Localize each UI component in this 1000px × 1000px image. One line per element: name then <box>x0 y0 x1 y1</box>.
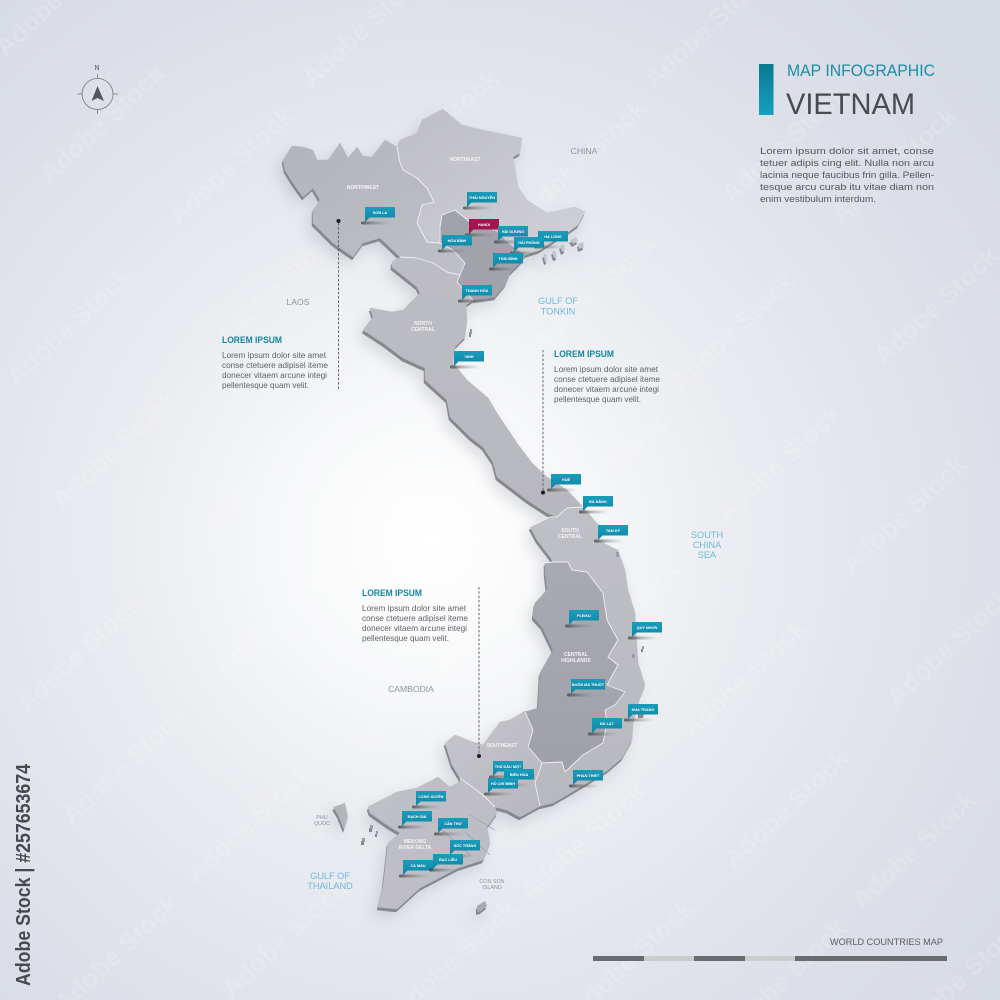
watermarks: Adobe Stock <box>716 78 853 209</box>
map of Vietnam <box>283 109 645 912</box>
label: south china sea: SOUTH <box>691 530 723 540</box>
label: gulf of thailand: GULF OF <box>310 871 350 881</box>
pin: Son La <box>361 207 395 224</box>
region: southeast <box>445 711 542 817</box>
callout leader: central <box>541 350 545 494</box>
subtitle: map infographic: MAP INFOGRAPHIC <box>787 62 935 80</box>
callout: south: LOREM IPSUM <box>362 588 422 599</box>
callout: center: conse ctetuere adipisel iteme <box>554 374 660 384</box>
label: laos: LAOS <box>287 297 310 307</box>
pin: Nha Trang <box>624 704 658 722</box>
watermarks: Adobe Stock <box>34 58 171 189</box>
pin: Thu Dau Mot <box>489 761 523 778</box>
pin: Hoa Binh <box>438 235 472 252</box>
pin: Hai Phong: HẢI PHÒNG <box>518 240 540 245</box>
callout: south: conse ctetuere adipisel iteme <box>362 613 468 623</box>
river channels <box>440 815 495 855</box>
pin: Rach Gia: RẠCH GIÁ <box>408 814 427 819</box>
callout: south: Lorem ipsum dolor site amet <box>362 603 467 613</box>
pin: Nha Trang: NHA TRANG <box>632 708 654 712</box>
pin: Pleiku <box>565 610 599 628</box>
label: south central: SOUTH <box>561 528 579 534</box>
pin: Thai Binh <box>489 253 523 270</box>
watermarks: Adobe Stock <box>11 588 148 719</box>
pin: Da Lat <box>588 718 622 736</box>
watermarks: Adobe Stock <box>526 228 663 359</box>
pin: Hai Duong <box>494 226 528 244</box>
watermarks: Adobe Stock <box>514 776 651 907</box>
callout: center: LOREM IPSUM <box>554 349 614 360</box>
watermarks: Adobe Stock <box>346 628 483 759</box>
label: northwest: NORTHWEST <box>347 185 379 191</box>
callout: center: donecer vitaem arcune integi <box>554 384 659 394</box>
region: mekong river delta <box>368 777 497 909</box>
label: north central: NORTH <box>414 321 432 327</box>
pin: Hue: HUẾ <box>562 477 570 482</box>
islands: ha long bay <box>543 237 584 262</box>
label: south china sea: SEA <box>698 550 717 560</box>
pin: Da Nang <box>579 496 613 514</box>
pin: Tam Ky <box>594 525 628 542</box>
watermarks: Adobe Stock <box>664 266 801 397</box>
pin: Soc Trang: SÓC TRĂNG <box>454 843 476 848</box>
watermarks: Adobe Stock <box>718 743 855 874</box>
callout: left <box>222 335 328 390</box>
pin: Bien Hoa: BIÊN HÒA <box>510 772 529 777</box>
label: gulf of thailand: THAILAND <box>307 881 353 891</box>
pin: Rach Gia <box>398 811 432 828</box>
island: phu quoc <box>333 803 348 830</box>
watermarks: Adobe Stock <box>334 269 471 400</box>
pin: Long Xuyen: LONG XUYÊN <box>418 794 444 799</box>
pin: Ca Mau: CÀ MAU <box>410 863 426 868</box>
pin: Phan Thiet: PHAN THIẾT <box>577 773 600 778</box>
label: south china sea: CHINA <box>693 540 722 550</box>
label: southeast: SOUTHEAST <box>487 743 517 749</box>
pin: Can Tho: CẦN THƠ <box>444 822 463 826</box>
label: con son island: CON SON <box>479 879 505 885</box>
watermarks: Adobe Stock <box>676 613 813 744</box>
callout: center: Lorem ipsum dolor site amet <box>554 364 659 374</box>
label: north central: CENTRAL <box>411 327 435 333</box>
pin: Hanoi <box>465 219 499 236</box>
pin: Hai Phong <box>510 237 544 254</box>
intro paragraph: tetuer adipis cing elit. Nulla non arcu <box>760 157 934 168</box>
pin: Phan Thiet <box>569 770 603 788</box>
pin: Bac Lieu: BẠC LIÊU <box>439 857 457 862</box>
watermarks: Adobe Stock <box>208 553 345 684</box>
region: central highlands <box>525 562 625 772</box>
pin: Quy Nhon <box>628 622 662 640</box>
pin: Da Nang: ĐÀ NẴNG <box>589 499 607 504</box>
label: central highlands: CENTRAL <box>564 652 588 658</box>
pin: Ho Chi Minh <box>484 778 518 796</box>
watermarks: Adobe Stock <box>46 384 183 515</box>
callout: center <box>554 349 660 404</box>
watermarks: Adobe Stock <box>163 100 300 231</box>
watermarks: Adobe Stock <box>1 261 138 392</box>
watermarks: Adobe Stock <box>549 554 686 685</box>
watermarks: Adobe Stock <box>56 700 193 831</box>
pin: Ha Long: HẠ LONG <box>544 235 562 239</box>
title bar <box>759 64 774 115</box>
label: mekong river delta: RIVER DELTA <box>399 845 432 851</box>
region: south central <box>530 507 645 806</box>
pin: Pleiku: PLEIKU <box>577 614 591 618</box>
region: northwest <box>283 140 465 275</box>
watermarks: Adobe Stock <box>216 873 353 1000</box>
pin: Vinh <box>450 351 484 368</box>
callout: left: pellentesque quam velit. <box>222 380 309 390</box>
intro paragraph: tesque arcu curab itu vitae diam non <box>760 181 934 192</box>
callout leader: south <box>477 587 481 758</box>
label: cambodia: CAMBODIA <box>388 684 434 694</box>
pin: Soc Trang <box>446 840 480 858</box>
pin: Can Tho <box>434 818 468 836</box>
callout leader: northwest <box>336 219 340 390</box>
pin: Ha Long <box>534 231 568 248</box>
label: gulf of tonkin: GULF OF <box>538 296 578 306</box>
compass <box>78 65 118 114</box>
title: Vietnam: VIETNAM <box>786 88 915 121</box>
label: phu quoc: QUOC <box>314 821 330 827</box>
watermarks: Adobe Stock <box>826 100 963 231</box>
pin: Vinh: VINH <box>464 355 474 359</box>
intro paragraph: Lorem ipsum dolor sit amet, conse <box>760 145 934 156</box>
label: northeast: NORTHEAST <box>449 157 481 163</box>
pin: Thanh Hoa <box>458 285 492 302</box>
label: central highlands: HIGHLANDS <box>561 658 592 664</box>
island: con son <box>477 901 487 912</box>
pin: Thanh Hoa: THANH HÓA <box>466 288 489 293</box>
label: phu quoc: PHU <box>316 815 328 821</box>
pin: Ca Mau <box>399 860 433 878</box>
label: con son island: ISLAND <box>482 885 502 891</box>
islands: small coastal <box>362 329 645 842</box>
pin: Hoa Binh: HÒA BÌNH <box>448 238 467 243</box>
pin: Quy Nhon: QUY NHƠN <box>637 626 658 630</box>
watermarks: Adobe Stock <box>209 221 346 352</box>
callout: south <box>362 588 468 643</box>
watermarks: Adobe Stock <box>379 394 516 525</box>
label: gulf of tonkin: TONKIN <box>541 306 575 316</box>
intro paragraph: lacinia neque faucibus frin gilla. Pellen- <box>760 169 934 180</box>
pin: Long Xuyen <box>412 791 446 808</box>
watermarks: Adobe Stock <box>196 406 333 537</box>
pin: Bac Lieu <box>429 854 463 872</box>
footer label: WORLD COUNTRIES MAP <box>830 937 943 948</box>
pin: Hai Duong: HẢI DƯƠNG <box>502 229 524 234</box>
watermarks: Adobe Stock <box>368 63 505 194</box>
watermarks: Adobe Stock <box>836 449 973 580</box>
pin: Thu Dau Mot: THỦ DẦU MỘT <box>495 764 522 769</box>
callout: left: Lorem ipsum dolor site amet <box>222 350 327 360</box>
region borders <box>397 147 625 807</box>
label: china: CHINA <box>571 146 598 156</box>
pin: Da Lat: ĐÀ LẠT <box>600 721 615 726</box>
region: northeast <box>397 109 585 255</box>
intro paragraph <box>760 145 934 204</box>
pin: Son La: SƠN LA <box>373 211 388 215</box>
callout: left: LOREM IPSUM <box>222 335 282 346</box>
watermarks: Adobe Stock <box>516 93 653 224</box>
label: south central: CENTRAL <box>558 534 582 540</box>
pin: Hue <box>547 474 581 492</box>
callout: left: donecer vitaem arcune integi <box>222 370 327 380</box>
label: mekong river delta: MEKONG <box>404 839 426 845</box>
pin: Hanoi: HANOI <box>478 223 490 227</box>
pin: Thai Binh: THÁI BÌNH <box>498 256 518 261</box>
stock credit: Adobe Stock | #257653674 <box>13 763 35 986</box>
watermarks: Adobe Stock <box>181 758 318 889</box>
watermarks: Adobe Stock <box>536 408 673 539</box>
watermarks: Adobe Stock <box>711 398 848 529</box>
watermarks: Adobe Stock <box>846 784 983 915</box>
callout: south: pellentesque quam velit. <box>362 633 449 643</box>
pin: Thai Nguyen <box>463 192 497 210</box>
callout: south: donecer vitaem arcune integi <box>362 623 467 633</box>
compass: N <box>94 65 100 72</box>
callout: left: conse ctetuere adipisel iteme <box>222 360 328 370</box>
pin: Buon Ma Thuot <box>567 679 605 696</box>
pin: Thai Nguyen: THÁI NGUYÊN <box>469 195 495 200</box>
region: north central <box>363 257 583 517</box>
scale bar <box>593 956 947 961</box>
callout: center: pellentesque quam velit. <box>554 394 641 404</box>
region: red river delta <box>440 210 525 300</box>
intro paragraph: enim vestibulum interdum. <box>760 193 876 204</box>
pin: Tam Ky: TAM KỲ <box>606 528 621 533</box>
pin: Bien Hoa <box>500 769 534 786</box>
pin: Ho Chi Minh: HỒ CHÍ MINH <box>491 781 515 786</box>
pin: Buon Ma Thuot: BUÔN MA THUỘT <box>572 682 605 687</box>
